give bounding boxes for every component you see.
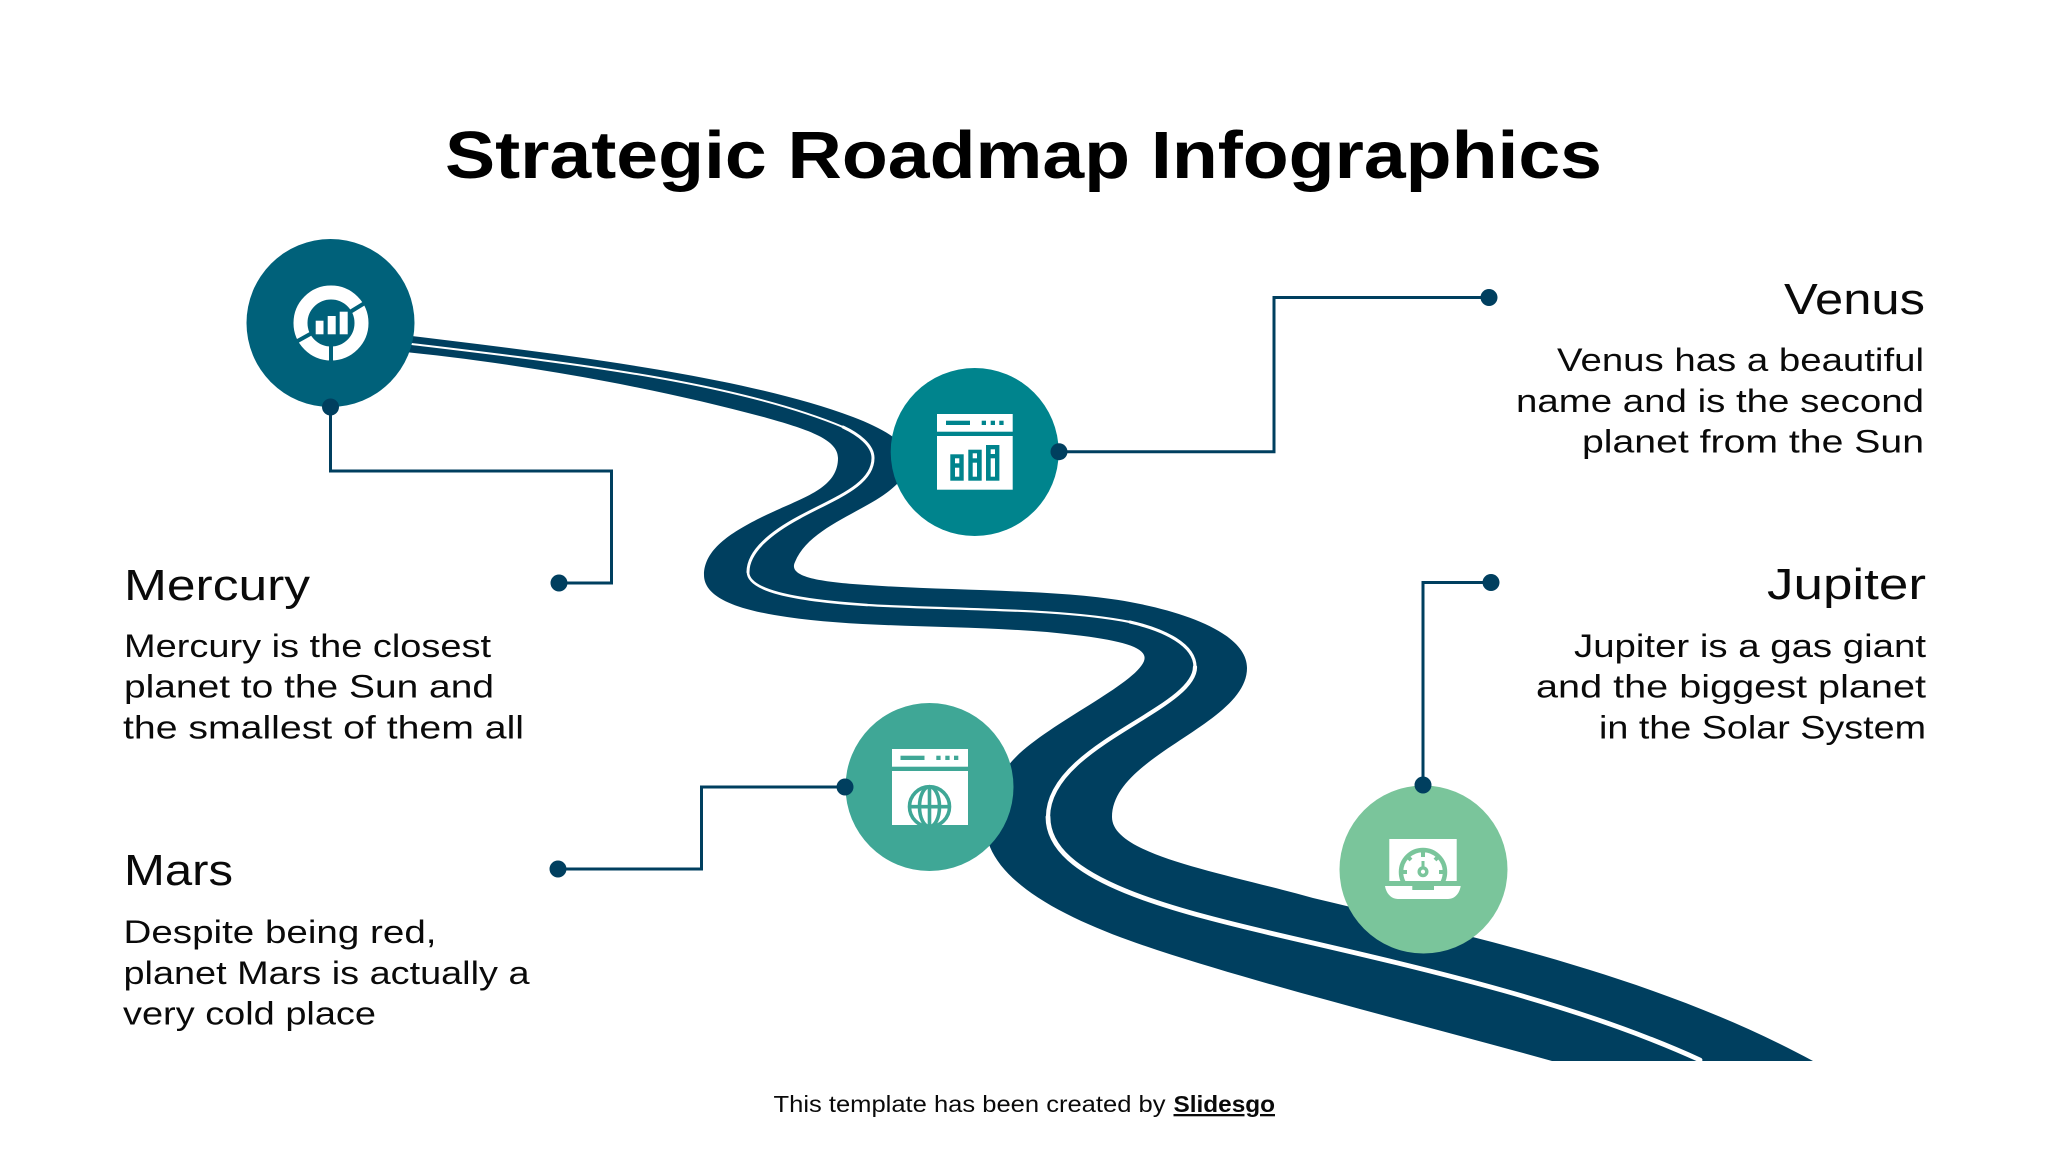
text block: Venus: planet from the Sun: [1582, 424, 1924, 460]
marker: Jupiter circle with laptop gauge icon: [1340, 786, 1508, 954]
text block: Jupiter: in the Solar System: [1599, 710, 1926, 746]
text block: Venus: Venus: [1784, 275, 1925, 324]
text block: Mars: Mars: [124, 846, 233, 895]
text block: Jupiter: Jupiter: [1767, 560, 1926, 609]
road centre line: [395, 342, 1700, 1060]
marker: Mars circle with browser globe icon: [846, 703, 1014, 871]
dot: Venus label: [1480, 289, 1498, 306]
dot: Mars label: [550, 860, 566, 878]
text block: Jupiter: [1536, 560, 1926, 746]
text block: Mars: [123, 846, 531, 1032]
text block: Mercury: the smallest of them all: [123, 710, 524, 746]
text block: Venus: Venus has a beautiful: [1557, 342, 1924, 378]
text block: Mercury: Mercury is the closest: [124, 628, 491, 664]
marker: Venus circle with browser bar chart icon: [891, 368, 1059, 536]
text block: Mars: very cold place: [123, 996, 376, 1032]
connector: Mercury: [330, 407, 612, 583]
text block: Mercury: [123, 561, 524, 746]
text block: Jupiter: and the biggest planet: [1536, 668, 1926, 704]
text block: Jupiter: Jupiter is a gas giant: [1574, 628, 1926, 664]
footer credit: Slidesgo: [1174, 1091, 1275, 1117]
winding road: [395, 334, 1813, 1061]
text block: Mars: planet Mars is actually a: [124, 955, 531, 991]
title: Strategic Roadmap Infographics: [445, 118, 1602, 193]
text block: Mercury: planet to the Sun and: [124, 668, 494, 704]
dot: Mercury label: [550, 574, 568, 592]
dot: Jupiter label: [1482, 574, 1500, 591]
connector: Venus: [1059, 298, 1489, 452]
text block: Venus: [1516, 275, 1925, 460]
connector: Mars: [558, 787, 845, 869]
dot: Jupiter circle: [1414, 776, 1432, 794]
footer credit: This template has been created by: [774, 1091, 1166, 1117]
dot: Mars circle: [836, 778, 854, 796]
connector: Jupiter: [1423, 582, 1491, 785]
text block: Venus: name and is the second: [1516, 383, 1924, 419]
marker: Mercury circle with donut chart icon: [246, 239, 414, 407]
dot: Venus circle: [1050, 443, 1068, 460]
dot: Mercury circle: [322, 398, 339, 416]
text block: Mercury: Mercury: [124, 561, 310, 610]
text block: Mars: Despite being red,: [124, 914, 436, 950]
